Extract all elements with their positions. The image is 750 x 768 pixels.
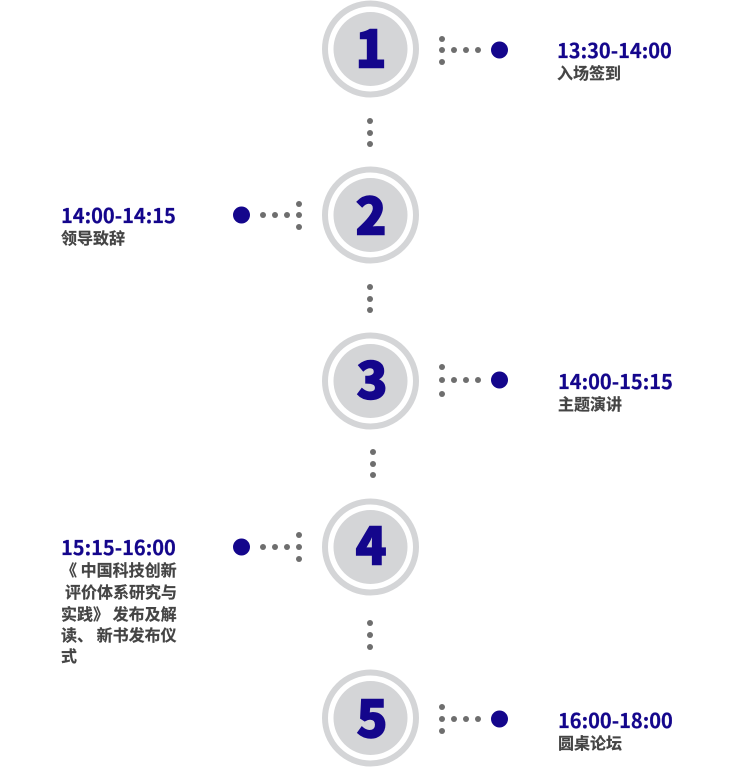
label 4: 评价体系研究与 bbox=[65, 579, 177, 603]
connector 4 bbox=[260, 532, 302, 562]
label 4 bbox=[61, 532, 177, 667]
connector 2 bbox=[260, 201, 302, 230]
vertical dots 4-5 bbox=[367, 620, 373, 650]
label 3 bbox=[558, 366, 673, 415]
label 2: 领导致辞 bbox=[61, 225, 125, 249]
label 5: 16:00-18:00 bbox=[558, 705, 673, 734]
label 4: 读、 新书发布仪 bbox=[61, 622, 177, 646]
label 4: 15:15-16:00 bbox=[61, 532, 176, 561]
vertical dots 1-2 bbox=[367, 118, 373, 147]
marker dot 5 bbox=[491, 710, 508, 728]
label 2 bbox=[61, 200, 176, 249]
label 3: 主题演讲 bbox=[558, 391, 622, 415]
connector 1 bbox=[439, 36, 481, 65]
label 1 bbox=[557, 35, 672, 84]
label 1: 入场签到 bbox=[557, 60, 621, 84]
label 4: 式 bbox=[61, 643, 77, 667]
label 4: 《 中国科技创新 bbox=[61, 557, 177, 581]
label 5: 圆桌论坛 bbox=[558, 730, 622, 754]
step 5 circle: 5 bbox=[356, 678, 388, 752]
marker dot 1 bbox=[491, 42, 508, 58]
label 3: 14:00-15:15 bbox=[558, 366, 673, 395]
marker dot 3 bbox=[491, 372, 508, 388]
step 3 circle: 3 bbox=[356, 340, 388, 414]
step 5 circle bbox=[325, 672, 416, 764]
marker dot 4 bbox=[233, 538, 250, 556]
step 4 circle: 4 bbox=[355, 506, 387, 580]
step 1 circle: 1 bbox=[355, 8, 387, 82]
label 1: 13:30-14:00 bbox=[557, 35, 672, 64]
step 2 circle bbox=[325, 170, 416, 260]
step 2 circle: 2 bbox=[355, 176, 387, 250]
vertical dots 3-4 bbox=[370, 449, 376, 478]
step 4 circle bbox=[325, 502, 416, 592]
connector 5 bbox=[439, 704, 481, 734]
label 2: 14:00-14:15 bbox=[61, 200, 176, 229]
connector 3 bbox=[439, 364, 481, 397]
label 5 bbox=[558, 705, 673, 754]
marker dot 2 bbox=[233, 206, 250, 224]
step 1 circle bbox=[325, 4, 416, 94]
vertical dots 2-3 bbox=[367, 284, 373, 313]
label 4: 实践》 发布及解 bbox=[61, 601, 177, 625]
step 3 circle bbox=[325, 336, 416, 426]
